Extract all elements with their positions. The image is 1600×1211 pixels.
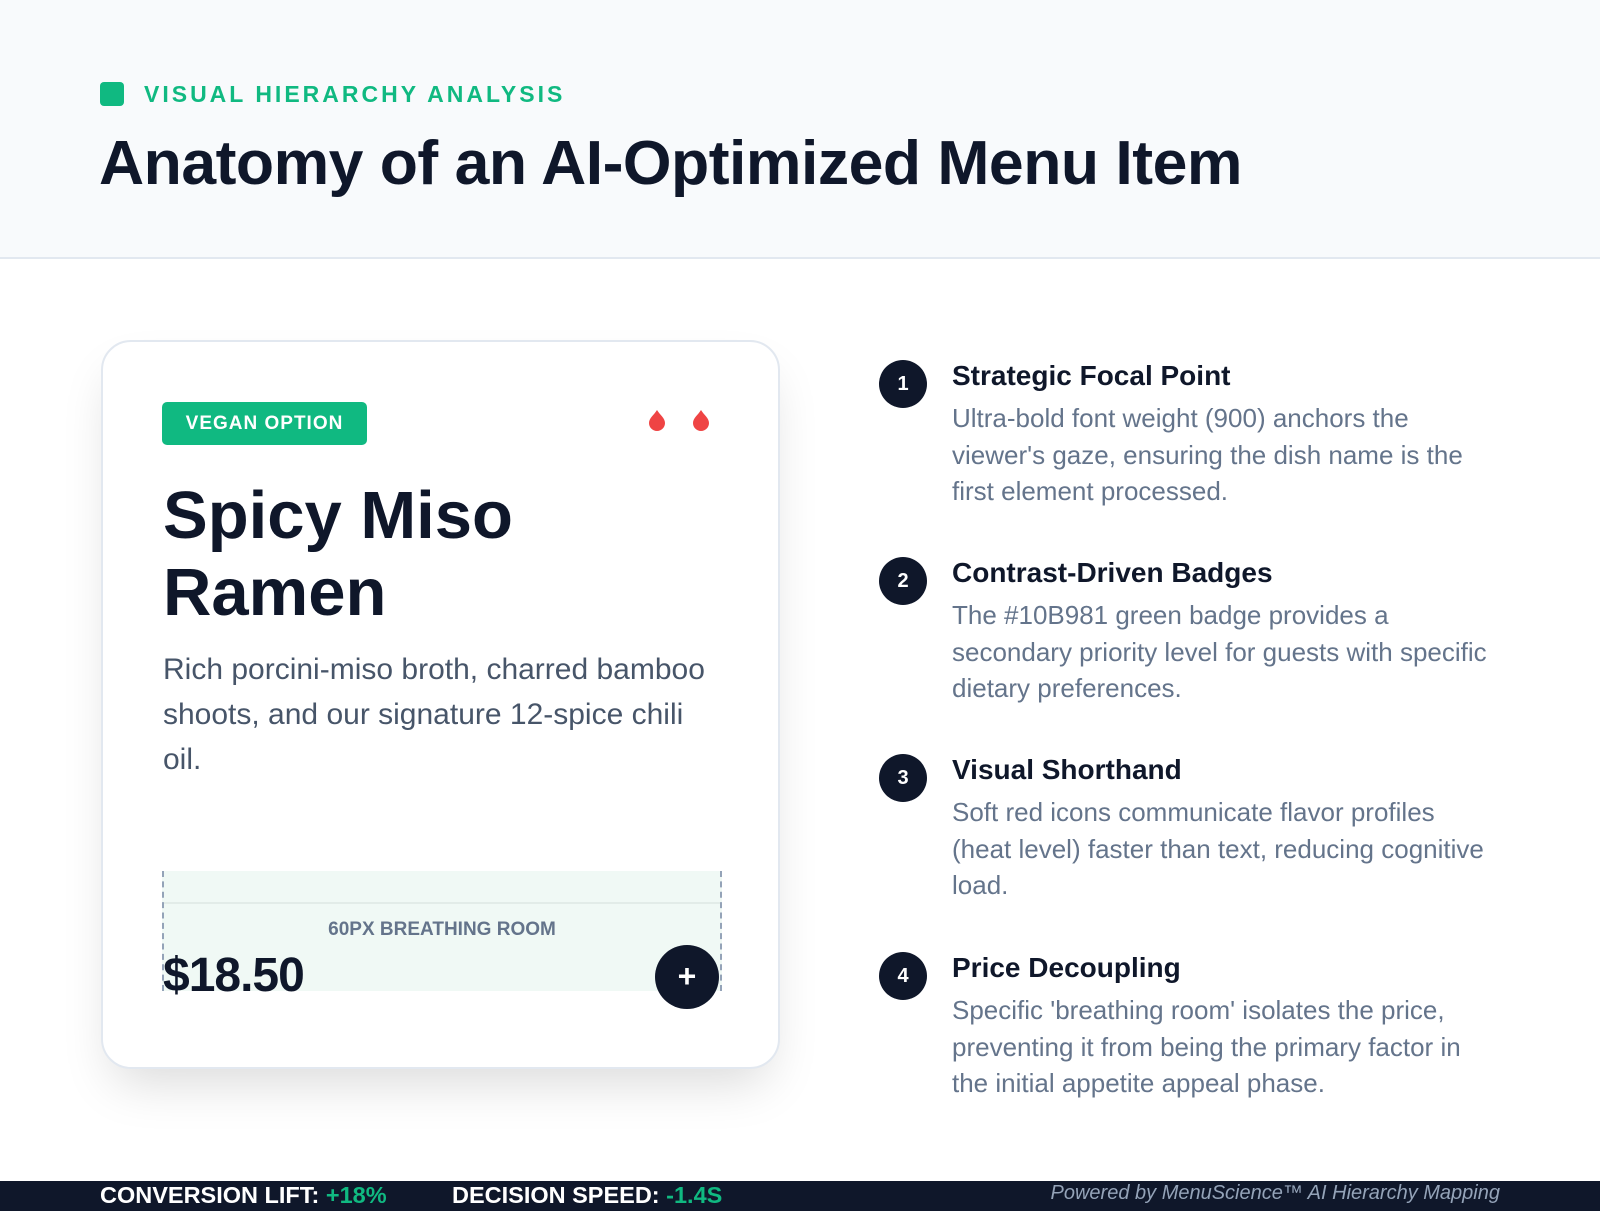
list: annotations [879, 360, 1487, 1098]
icon: add button: + [678, 958, 696, 994]
description: Rich porcini-miso broth, charred bamboo shoots, and our signature 12-spice chili oil. [163, 653, 705, 776]
item 3: Soft red icons communicate flavor profiles (heat level) faster than text, reducing cognitive load. [952, 797, 1484, 900]
dish name: Ramen [163, 555, 386, 630]
item 3: 3 [897, 767, 909, 789]
item 2: Contrast-Driven Badges [952, 557, 1273, 588]
footer bar [0, 1181, 1600, 1211]
badge: vegan option: VEGAN OPTION [186, 413, 343, 434]
item 2: 2 [897, 570, 909, 592]
item 4 [879, 952, 1461, 1098]
price: $18.50 [163, 949, 304, 1002]
dish name [163, 478, 513, 630]
dish name: Spicy Miso [163, 478, 513, 553]
label: breathing room: 60PX BREATHING ROOM [328, 919, 556, 940]
icon: heat drops [649, 410, 709, 431]
item 1: 1 [897, 373, 909, 395]
item 4: Price Decoupling [952, 952, 1181, 983]
icon: add button [655, 945, 719, 1009]
item 1: Strategic Focal Point [952, 360, 1230, 391]
breathing room zone [162, 871, 722, 991]
stat: decision speed: DECISION SPEED: -1.4S [452, 1182, 722, 1208]
item 2 [879, 557, 1487, 703]
item 1 [879, 360, 1463, 506]
item 4: 4 [897, 965, 909, 987]
header band [0, 0, 1600, 259]
stat: conversion lift: CONVERSION LIFT: +18% [100, 1182, 387, 1208]
title: Anatomy of an AI-Optimized Menu Item [99, 128, 1242, 198]
item 3 [879, 754, 1484, 900]
badge: vegan option [162, 402, 367, 445]
label: section tag: VISUAL HIERARCHY ANALYSIS [144, 81, 565, 107]
item 1: Ultra-bold font weight (900) anchors the viewer's gaze, ensuring the dish name is the first element processed. [952, 403, 1463, 506]
credit: Powered by MenuScience™ AI Hierarchy Mapping [1051, 1182, 1500, 1204]
panel: menu card [101, 340, 780, 1069]
item 4: Specific 'breathing room' isolates the price, preventing it from being the primary factor in the initial appetite appeal phase. [952, 995, 1461, 1098]
item 2: The #10B981 green badge provides a secondary priority level for guests with specific dietary preferences. [952, 600, 1487, 703]
item 3: Visual Shorthand [952, 754, 1182, 785]
